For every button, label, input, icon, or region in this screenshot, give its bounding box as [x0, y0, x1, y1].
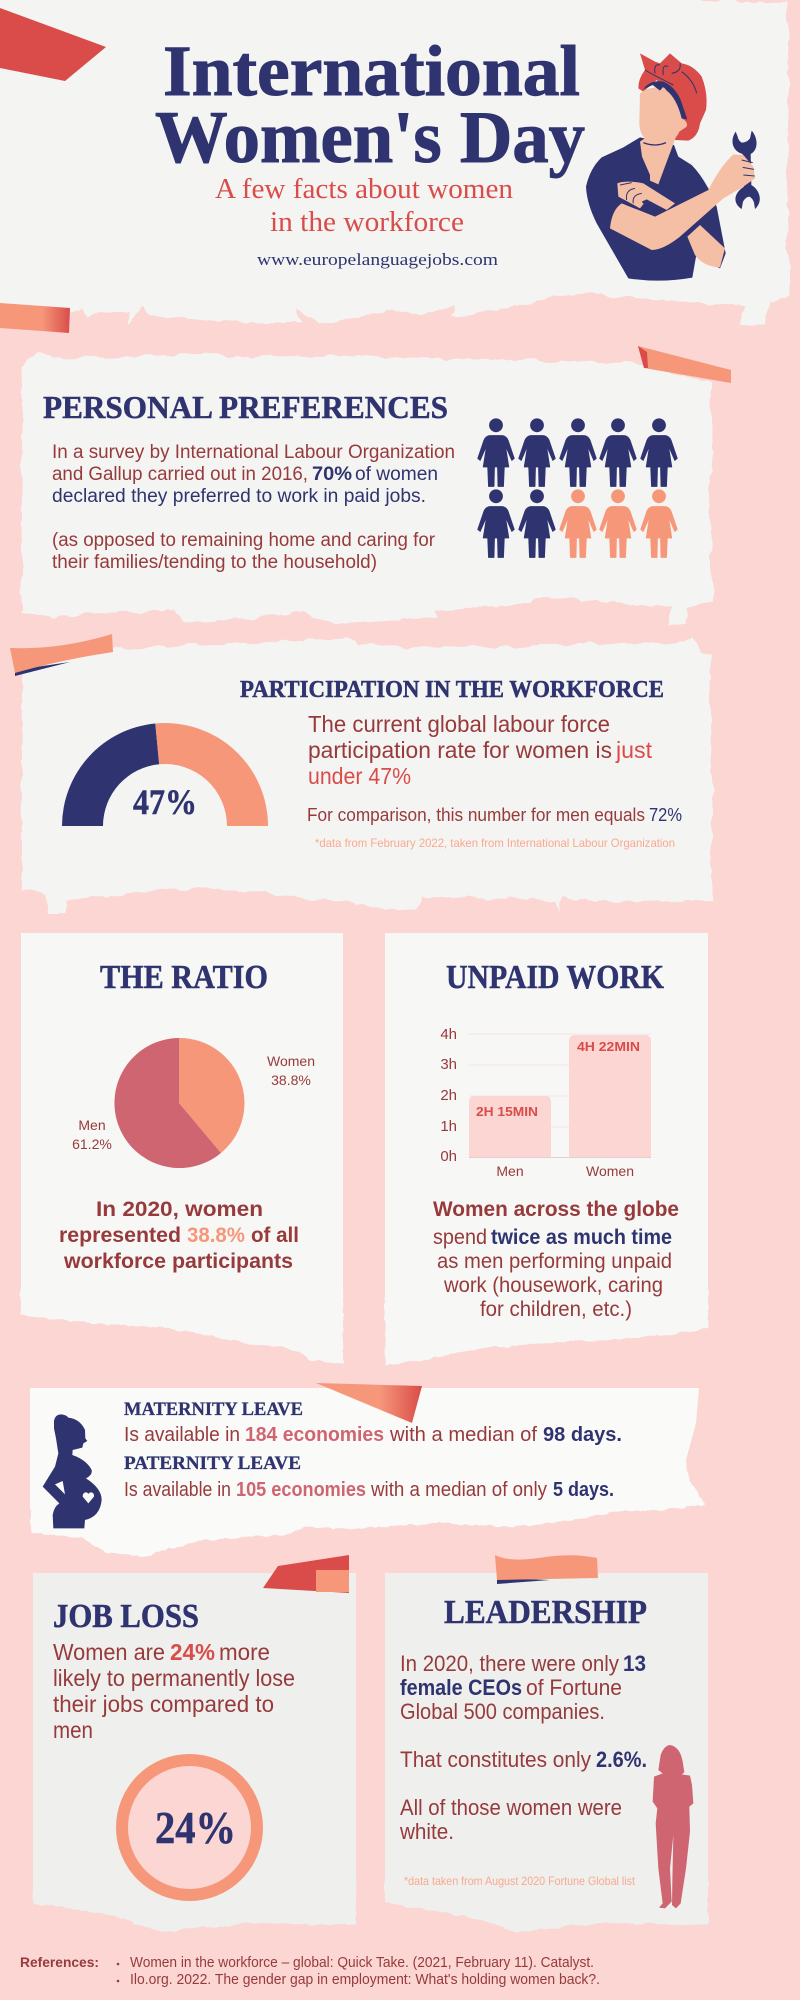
paternity leave: 5 days.: [553, 1479, 614, 1501]
bar chart: 4h: [440, 1026, 457, 1043]
heading: LEADERSHIP: [444, 1594, 647, 1631]
text block: more: [219, 1639, 270, 1665]
text block: of Fortune: [526, 1675, 622, 1700]
heading: UNPAID WORK: [446, 959, 664, 996]
text block: just: [615, 737, 653, 763]
text block: The current global labour force: [308, 711, 610, 737]
comparison text: For comparison, this number for men equals: [307, 805, 645, 825]
text block: (as opposed to remaining home and caring for: [52, 530, 436, 551]
text block: of women: [355, 464, 438, 485]
text block: 70%: [312, 464, 352, 485]
text block: work (housework, caring: [443, 1274, 663, 1297]
tape: red top left: [0, 8, 106, 81]
title: Women's Day: [155, 97, 585, 179]
references: [20, 1954, 600, 1988]
text block: In 2020, women: [96, 1198, 263, 1221]
tape: red and orange: [263, 1555, 349, 1593]
text block: represented: [59, 1224, 181, 1247]
pie chart: 61.2%: [72, 1136, 112, 1152]
paternity leave: [124, 1453, 614, 1501]
text block: under 47%: [308, 763, 411, 789]
maternity leave: with a median of: [389, 1424, 537, 1446]
text block: likely to permanently lose: [53, 1665, 295, 1691]
text block: their families/tending to the household): [52, 552, 377, 573]
tape: orange with navy strip: [10, 634, 113, 676]
text block: twice as much time: [491, 1226, 672, 1249]
title: International: [163, 31, 580, 111]
tape: orange bottom left: [0, 303, 70, 333]
icon: pregnant woman: [43, 1414, 102, 1528]
tape: orange triangle: [316, 1383, 422, 1423]
text block: 2.6%.: [596, 1747, 647, 1772]
panel: personal preferences: [22, 346, 731, 625]
paternity leave: PATERNITY LEAVE: [124, 1453, 301, 1474]
pie chart: Men: [78, 1117, 106, 1133]
ring chart: 24%: [122, 1760, 257, 1895]
text block: for children, etc.): [480, 1298, 632, 1321]
text block: [399, 1651, 647, 1844]
text block: 24%: [170, 1639, 215, 1665]
text block: [59, 1198, 299, 1273]
gauge chart: [62, 723, 268, 826]
bar chart: Men: [496, 1163, 524, 1179]
text block: female CEOs: [400, 1675, 522, 1700]
text block: In a survey by International Labour Organization: [52, 442, 455, 463]
text block: All of those women were: [400, 1795, 622, 1820]
references: Ilo.org. 2022. The gender gap in employment: What's holding women back?.: [130, 1971, 600, 1988]
ring chart: 24%: 24%: [155, 1802, 236, 1853]
panel: leadership: [385, 1555, 708, 1932]
bar chart: 2h: [440, 1087, 457, 1104]
text block: [53, 1639, 295, 1743]
paternity leave: 105 economies: [236, 1479, 366, 1501]
comparison text: 72%: [649, 805, 682, 825]
tape: orange: [638, 346, 731, 383]
bar chart: 4H 22MIN: [577, 1039, 640, 1054]
pie chart: [72, 1038, 315, 1168]
icon: woman silhouette: [653, 1745, 693, 1908]
heading: PERSONAL PREFERENCES: [43, 389, 448, 425]
bar chart: 1h: [440, 1118, 457, 1135]
text block: Women across the globe: [433, 1198, 679, 1221]
panel: unpaid work: [385, 933, 708, 1365]
text block: of all: [251, 1224, 299, 1247]
maternity leave: Is available in: [124, 1424, 240, 1446]
bar chart: 3h: [440, 1056, 457, 1073]
text block: workforce participants: [63, 1250, 293, 1273]
panel: parental leave: [30, 1383, 704, 1557]
gauge chart: 47%: [133, 782, 197, 822]
text block: [433, 1198, 679, 1321]
pictogram: 7 of 10 women: [478, 418, 677, 558]
subtitle: [215, 174, 513, 238]
text block: 13: [623, 1651, 646, 1676]
panel: header: [0, 0, 788, 333]
paternity leave: with a median of only: [370, 1479, 547, 1501]
bar chart: Women: [586, 1163, 634, 1179]
text block: as men performing unpaid: [437, 1250, 672, 1273]
text block: participation rate for women is: [308, 737, 612, 763]
paternity leave: Is available in: [124, 1479, 231, 1501]
footnote: *data taken from August 2020 Fortune Global list: [404, 1874, 636, 1888]
maternity leave: MATERNITY LEAVE: [124, 1399, 303, 1420]
references: References:: [20, 1954, 99, 1970]
text block: and Gallup carried out in 2016,: [52, 464, 308, 485]
text block: That constitutes only: [400, 1747, 591, 1772]
heading: JOB LOSS: [53, 1598, 199, 1635]
text block: declared they preferred to work in paid jobs.: [52, 486, 426, 507]
text block: spend: [433, 1226, 487, 1249]
text block: [308, 711, 653, 789]
panel: job loss: [33, 1555, 356, 1932]
text block: white.: [399, 1819, 454, 1844]
heading: THE RATIO: [100, 959, 268, 996]
pie chart: Women: [267, 1053, 315, 1069]
footnote: *data from February 2022, taken from International Labour Organization: [315, 836, 675, 850]
subtitle: in the workforce: [270, 207, 464, 238]
bar chart: 2H 15MIN: [476, 1104, 538, 1119]
bar chart: [440, 1026, 651, 1179]
text block: [52, 442, 455, 573]
illustration: woman with wrench: [586, 53, 760, 281]
text block: Women are: [53, 1639, 165, 1665]
references: Women in the workforce – global: Quick Take. (2021, February 11). Catalyst.: [130, 1954, 594, 1971]
bar chart: 0h: [440, 1148, 457, 1165]
maternity leave: [124, 1399, 622, 1446]
pie chart: 38.8%: [271, 1072, 311, 1088]
tape: orange with navy strip: [495, 1555, 598, 1584]
text block: 38.8%: [187, 1224, 245, 1247]
heading: PARTICIPATION IN THE WORKFORCE: [240, 677, 664, 703]
text block: Global 500 companies.: [400, 1699, 605, 1724]
text block: In 2020, there were only: [400, 1651, 619, 1676]
subtitle: A few facts about women: [215, 174, 513, 205]
website: www.europelanguagejobs.com: [257, 250, 498, 269]
text block: men: [53, 1717, 93, 1743]
text block: their jobs compared to: [53, 1691, 274, 1717]
maternity leave: 184 economies: [245, 1424, 384, 1446]
panel: the ratio: [21, 933, 343, 1363]
panel: participation in the workforce: [10, 634, 711, 912]
title: [155, 31, 585, 179]
maternity leave: 98 days.: [543, 1424, 622, 1446]
